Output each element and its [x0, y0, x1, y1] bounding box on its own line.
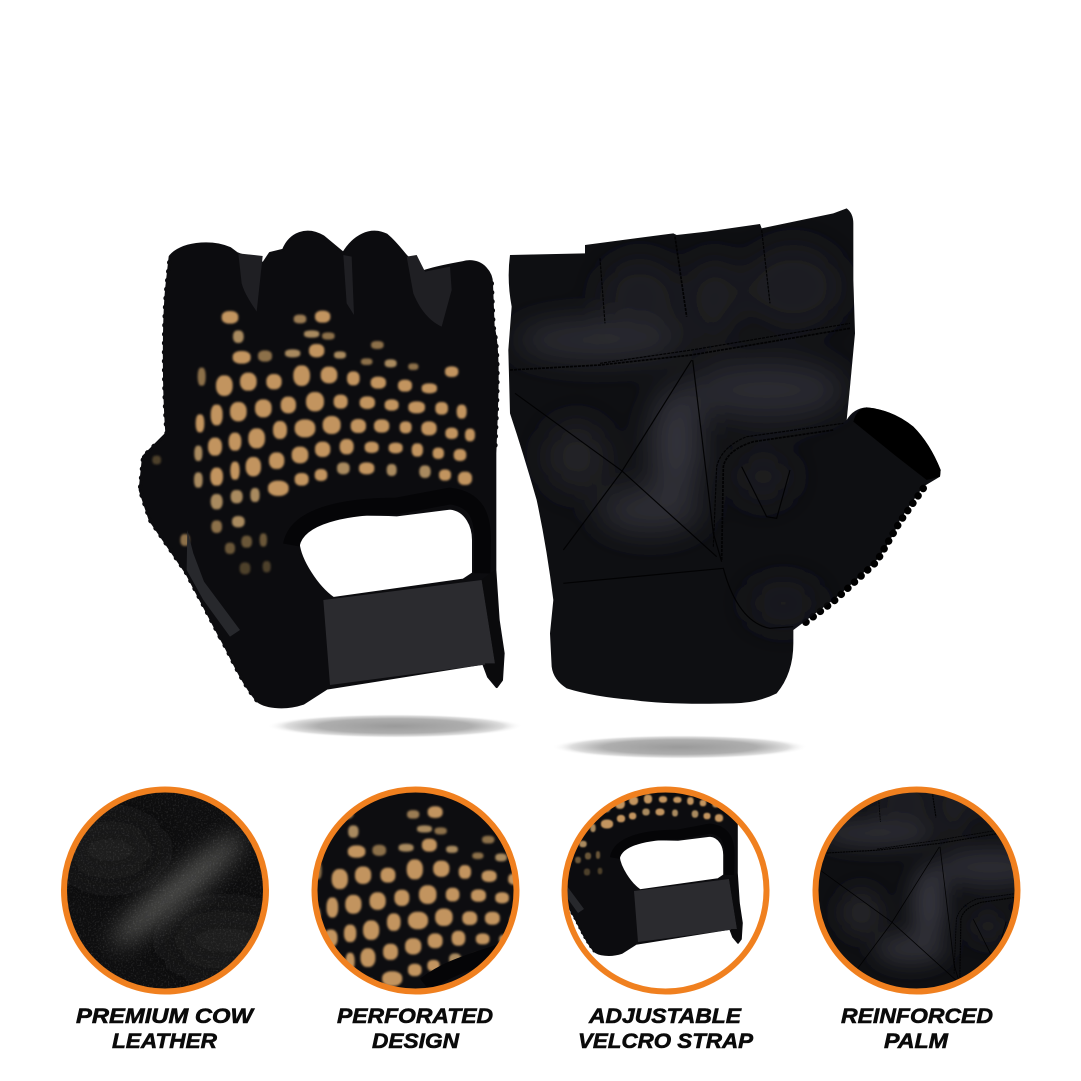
label: adjustable velcro strap: VELCRO STRAP: [578, 1030, 754, 1053]
strap stitched edge: [482, 570, 503, 687]
label: adjustable velcro strap: ADJUSTABLE: [588, 1005, 742, 1028]
orange ring: [64, 790, 266, 992]
elastic binding around wrist opening: [291, 496, 483, 573]
label: perforated design: [337, 1005, 493, 1053]
label: premium cow leather: [76, 1005, 255, 1053]
mesh openings: [153, 312, 474, 573]
leather finger gussets: [238, 253, 452, 327]
mesh close-up: [318, 792, 514, 988]
knitted thumb edge: [800, 488, 923, 627]
orange ring: [314, 790, 516, 992]
label: reinforced palm: [841, 1005, 993, 1053]
feature: reinforced palm: [812, 786, 1020, 994]
leather swatch: [67, 792, 263, 988]
orange ring: [564, 790, 766, 992]
feature: adjustable velcro strap: [562, 786, 770, 994]
orange ring: [816, 790, 1018, 992]
label: perforated design: DESIGN: [372, 1030, 460, 1053]
crochet edge bumps: [140, 257, 497, 700]
velcro strap: [323, 580, 495, 685]
label: perforated design: PERFORATED: [337, 1005, 493, 1028]
palm detail: shading and stitching: [510, 230, 850, 628]
left glove: mesh back with strap: [140, 232, 503, 707]
strap close-up: [568, 792, 743, 956]
strap side panel: [187, 530, 240, 637]
palm stitching: [510, 230, 850, 628]
shadow under right glove: [552, 735, 808, 759]
thumb tip opening: [853, 407, 941, 480]
feature: premium cow leather: [60, 787, 285, 994]
soft leather shading: [513, 243, 847, 627]
mesh glove body: [140, 232, 503, 707]
label: premium cow leather: PREMIUM COW: [76, 1005, 255, 1028]
label: reinforced palm: REINFORCED: [841, 1005, 993, 1028]
shadow under left glove: [267, 714, 523, 738]
label: reinforced palm: PALM: [884, 1030, 949, 1053]
palm base shape: [508, 208, 941, 704]
palm close-up: [818, 792, 1014, 988]
feature: perforated design: [312, 786, 520, 994]
label: adjustable velcro strap: [578, 1005, 754, 1053]
label: premium cow leather: LEATHER: [112, 1030, 218, 1053]
right glove: leather palm: [508, 208, 941, 704]
